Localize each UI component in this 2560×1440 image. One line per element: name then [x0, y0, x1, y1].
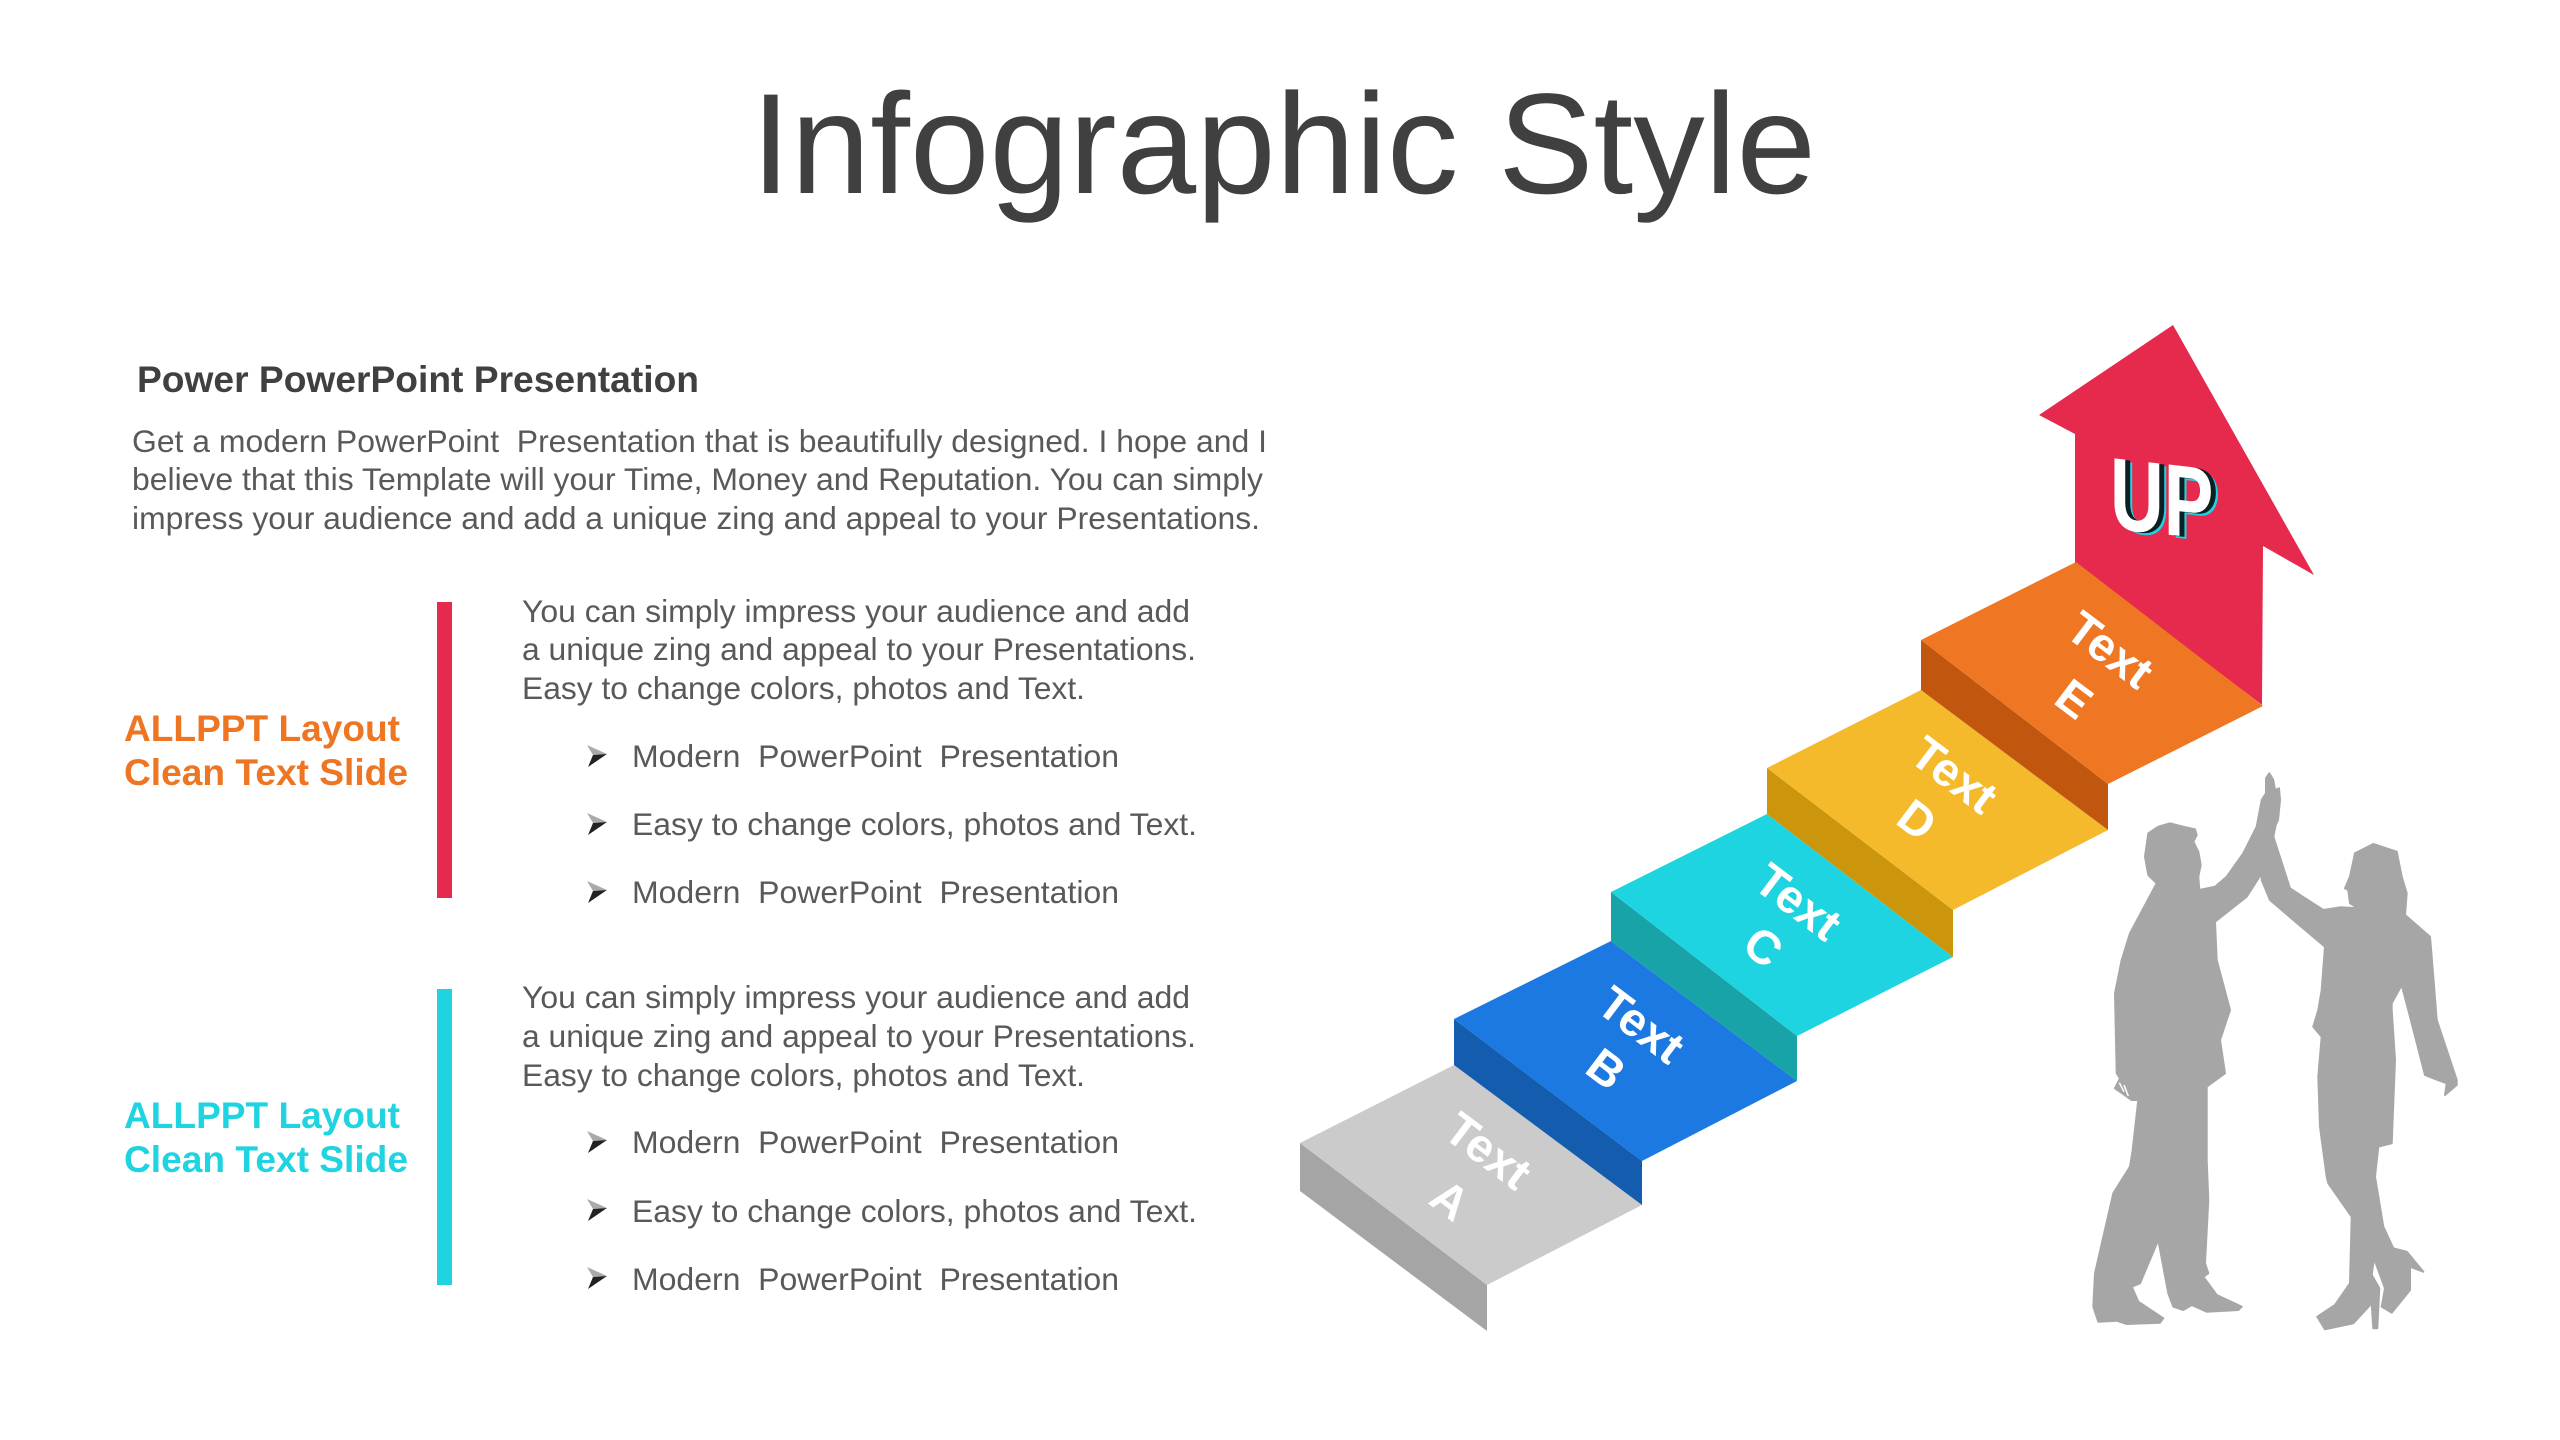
text block: intro paragraph: believe that this Template will your Time, Money and Reputation. You can simply [132, 461, 1263, 497]
text block: orange section: You can simply impress your audience and add [522, 593, 1190, 629]
text block: cyan section: a unique zing and appeal to your Presentations. [522, 1018, 1196, 1054]
step D: Text [1901, 725, 2008, 824]
step D: D [1888, 788, 1947, 851]
bullet list: cyan section: Modern PowerPoint Presentation [632, 1124, 1119, 1160]
bullet list: orange section: Modern PowerPoint Presentation [632, 738, 1119, 774]
text block: orange section: a unique zing and appeal to your Presentations. [522, 631, 1196, 667]
step B [1454, 941, 1797, 1205]
bullet list: orange section: Modern PowerPoint Presentation [632, 874, 1119, 910]
silhouette: woman [2262, 820, 2457, 1329]
chart: staircase arrow [1300, 325, 2314, 1331]
step A: A [1421, 1168, 1480, 1231]
text block: cyan section: Easy to change colors, photos and Text. [522, 1057, 1085, 1093]
label: cyan: Clean Text Slide [124, 1139, 408, 1180]
step E [1921, 562, 2263, 830]
bullet list: cyan section: Easy to change colors, photos and Text. [632, 1193, 1197, 1229]
step E: E [2046, 668, 2103, 729]
step A: Text [1435, 1101, 1542, 1200]
step C: C [1734, 915, 1793, 978]
label: orange: Clean Text Slide [124, 752, 408, 793]
step D [1767, 690, 2108, 957]
text block: intro paragraph: Get a modern PowerPoint Presentation that is beautifully designed. I hope and I [132, 423, 1267, 459]
step A [1300, 1065, 1642, 1331]
icon: bullet arrow [587, 745, 607, 767]
icon: bullet arrow [587, 1131, 607, 1153]
label: orange: ALLPPT Layout [124, 708, 400, 749]
arrow: up: UP [2110, 436, 2213, 561]
bullet list: orange section: Easy to change colors, photos and Text. [632, 806, 1197, 842]
icon: bullet arrow [587, 881, 607, 903]
text block: intro paragraph [132, 423, 1267, 536]
text block: cyan section: You can simply impress your audience and add [522, 979, 1190, 1015]
bar: red [437, 602, 452, 898]
text block: orange section: Easy to change colors, photos and Text. [522, 670, 1085, 706]
step E: Text [2057, 600, 2164, 699]
arrow: up: UP [2115, 437, 2218, 562]
bullet list: cyan section [587, 1124, 1197, 1297]
arrow: up: UP [2117, 439, 2220, 564]
icon: bullet arrow [587, 1267, 607, 1289]
text block: cyan section [522, 979, 1196, 1093]
step C: Text [1745, 852, 1852, 951]
bullet list: cyan section: Modern PowerPoint Presentation [632, 1261, 1119, 1297]
icon: bullet arrow [587, 1199, 607, 1221]
heading: intro: Power PowerPoint Presentation [137, 359, 699, 400]
text block: orange section [522, 593, 1196, 706]
label: orange [124, 708, 408, 793]
icon: bullet arrow [587, 813, 607, 835]
arrow: up [2039, 325, 2314, 705]
text block: intro paragraph: impress your audience and add a unique zing and appeal to your Presentations. [132, 500, 1260, 536]
bar: cyan [437, 989, 452, 1285]
silhouette: man [2093, 773, 2280, 1324]
bullet list: orange section [587, 738, 1197, 910]
panel: orange section [124, 593, 1197, 910]
label: cyan [124, 1095, 408, 1180]
panel: cyan section [124, 979, 1197, 1297]
step B: B [1577, 1037, 1636, 1100]
label: cyan: ALLPPT Layout [124, 1095, 400, 1136]
title: Infographic Style [751, 65, 1816, 224]
icon: high-five silhouettes [2093, 773, 2457, 1329]
step B: Text [1588, 975, 1695, 1074]
step C [1611, 814, 1953, 1081]
